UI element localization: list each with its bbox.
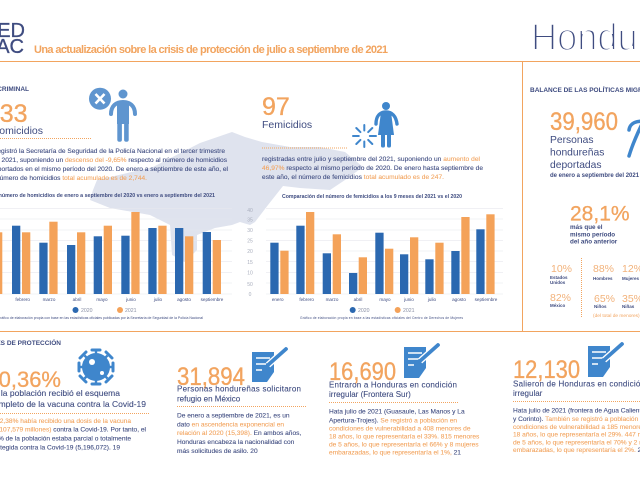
legend: 2020 bbox=[358, 308, 370, 314]
icon: document and pen bbox=[252, 349, 286, 382]
comparison bbox=[570, 224, 618, 246]
gender stats: (del total de menores) bbox=[593, 313, 640, 319]
text block bbox=[329, 408, 480, 456]
month labels bbox=[15, 297, 224, 302]
label bbox=[329, 380, 457, 399]
icon: document and pen bbox=[588, 344, 622, 377]
panel: salidas bbox=[513, 344, 640, 454]
bars 2020 bbox=[12, 226, 211, 294]
text block: dato en ascendencia exponencial en bbox=[177, 422, 284, 428]
comparison: más que el bbox=[570, 224, 603, 231]
gender stats: 65% bbox=[594, 293, 615, 305]
destination stats: México bbox=[550, 303, 566, 308]
icon: virus bbox=[79, 350, 113, 384]
section rule bbox=[0, 331, 640, 332]
month labels: marzo bbox=[326, 297, 339, 302]
panel: balance de las políticas migratorias bbox=[530, 85, 640, 319]
bars 2021 bbox=[280, 212, 495, 294]
comparison: mismo período bbox=[570, 232, 615, 238]
month labels: enero bbox=[272, 297, 284, 302]
panel: homicidios bbox=[0, 86, 229, 182]
label bbox=[513, 380, 640, 398]
vertical divider bbox=[522, 62, 523, 331]
legend bbox=[72, 307, 137, 314]
gender stats: Hombres bbox=[593, 276, 613, 281]
panel: solicitudes de refugio bbox=[177, 349, 306, 455]
y axis labels: 15 bbox=[247, 260, 253, 266]
header rule bbox=[0, 61, 640, 62]
month labels: junio bbox=[125, 297, 136, 302]
label: irregular (Frontera Sur) bbox=[329, 390, 411, 399]
number: porcentaje: 28,1% bbox=[570, 202, 630, 226]
month labels: marzo bbox=[43, 297, 56, 302]
logo bbox=[0, 20, 25, 58]
label: Personas bbox=[550, 135, 594, 146]
text block bbox=[262, 156, 483, 181]
destination stats bbox=[550, 263, 572, 308]
y axis labels bbox=[247, 208, 253, 298]
legend: 2021 bbox=[125, 308, 137, 314]
month labels: abril bbox=[73, 297, 81, 302]
icon: woman with burst bbox=[353, 102, 397, 148]
label: Entraron a Honduras en condición bbox=[329, 380, 457, 390]
text block: De enero a septiembre de 2021, es un bbox=[177, 412, 290, 420]
text block bbox=[0, 148, 229, 182]
map of Honduras background bbox=[90, 132, 363, 262]
legend: 2021 bbox=[403, 308, 415, 314]
bars 2021 bbox=[0, 212, 221, 294]
y axis labels: 25 bbox=[247, 238, 253, 244]
text block: registradas entre julio y septiembre del 2021, suponiendo un aumento del bbox=[262, 156, 481, 163]
month labels: mayo bbox=[96, 297, 108, 302]
y axis labels: 50 bbox=[247, 282, 253, 288]
label: deportadas bbox=[550, 160, 602, 171]
label bbox=[0, 388, 146, 409]
month labels: julio bbox=[153, 297, 163, 302]
label: irregular bbox=[513, 389, 543, 398]
text block bbox=[513, 408, 640, 454]
month labels: abril bbox=[354, 297, 362, 302]
month labels: septiembre bbox=[475, 297, 498, 302]
number: 97 bbox=[262, 93, 290, 121]
y axis labels: 20 bbox=[247, 249, 253, 255]
dotted divider bbox=[580, 258, 582, 318]
source note: Gráfico de elaboración propia en base a las estadísticas oficiales del Centro de Derechos de Mujeres bbox=[300, 316, 463, 320]
dotted divider bbox=[513, 400, 640, 402]
text block bbox=[0, 418, 147, 452]
month labels: septiembre bbox=[201, 297, 224, 302]
bars 2020 bbox=[270, 226, 485, 294]
icon: arrow bbox=[629, 121, 640, 156]
month labels: mayo bbox=[379, 297, 391, 302]
destination stats: Unidos bbox=[550, 280, 566, 285]
label bbox=[177, 385, 301, 404]
dotted divider bbox=[0, 412, 150, 414]
label: Personas hondureñas solicitaron bbox=[177, 385, 301, 394]
source note: Gráfico de elaboración propia con base en las estadísticas oficiales publicadas por la Secretaría de Seguridad de la Policía Nacional bbox=[0, 316, 203, 320]
chart title: Comparación del número de femicidios a los 9 meses del 2021 vs el 2020 bbox=[282, 194, 462, 200]
destination stats: 82% bbox=[550, 292, 571, 304]
y axis labels: 10 bbox=[247, 270, 253, 276]
number: 12,130 bbox=[513, 356, 580, 384]
dotted divider bbox=[177, 406, 306, 408]
month labels: febrero bbox=[299, 297, 314, 302]
text block bbox=[177, 412, 301, 455]
period: de enero a septiembre del 2021 bbox=[550, 173, 640, 179]
gender stats: 88% bbox=[593, 263, 614, 275]
icon: document and pen bbox=[404, 345, 438, 378]
dotted divider bbox=[0, 138, 92, 140]
number: 16,690 bbox=[329, 358, 396, 386]
text block: Apertura-Trojes). Se registró a población en bbox=[329, 418, 457, 424]
chart: homicidios bbox=[0, 193, 232, 320]
label: refugio en México bbox=[177, 394, 241, 404]
y axis labels: 40 bbox=[247, 208, 253, 214]
month labels bbox=[272, 297, 498, 302]
chart: femicidios bbox=[247, 194, 503, 320]
text block: embarazadas, lo que representaría el 1%, 21 bbox=[329, 450, 461, 456]
text block: relación al 2020 (15,398). En ambos años, bbox=[177, 430, 301, 437]
number: 31,894 bbox=[177, 363, 245, 391]
text block: 46,97% respecto al mismo período de 2020. De enero hasta septiembre de bbox=[262, 165, 483, 172]
y axis labels: 30 bbox=[247, 228, 253, 234]
number: deportadas: 39,960 bbox=[550, 108, 618, 136]
panel: femicidios bbox=[262, 93, 483, 181]
month labels: agosto bbox=[177, 297, 191, 302]
destination stats: Estados bbox=[550, 275, 568, 280]
text block: 18 años, lo que representaría el 33%. 815 menores bbox=[329, 434, 480, 440]
title: Una actualización sobre la crisis de protección de julio a septiembre de 2021 bbox=[34, 44, 388, 56]
gender stats bbox=[593, 263, 640, 319]
text block: número de homicidios total acumulado es de 2,744. bbox=[0, 175, 147, 182]
dotted divider bbox=[262, 147, 347, 149]
icon: person with x bbox=[89, 88, 135, 142]
destination stats: 10% bbox=[551, 263, 572, 275]
label bbox=[550, 135, 604, 171]
legend: 2020 bbox=[81, 308, 93, 314]
panel: entradas por frontera sur bbox=[329, 345, 480, 456]
text block: Honduras encabeza la nacionalidad con bbox=[177, 439, 295, 446]
text block: Hata julio de 2021 (Guasaule, Las Manos y La bbox=[329, 408, 465, 416]
month labels: febrero bbox=[15, 297, 30, 302]
gender stats: Mujeres bbox=[622, 276, 640, 281]
panel: necesidades de protección bbox=[0, 338, 150, 452]
text block: de 5 años, lo que representaría el 66% y 8 mujeres bbox=[329, 442, 479, 448]
gender stats: Niños bbox=[594, 304, 607, 309]
text block: más solicitudes de asilo. 20 bbox=[177, 448, 258, 455]
month labels: julio bbox=[427, 297, 437, 302]
label: hondureñas bbox=[550, 148, 604, 158]
dotted divider bbox=[329, 402, 458, 404]
text block: este año, el número de femicidios total acumulado es de 247. bbox=[262, 174, 444, 181]
month labels: agosto bbox=[452, 297, 466, 302]
gender stats: Niñas bbox=[622, 304, 635, 309]
y axis labels: 0 bbox=[249, 292, 252, 298]
month labels: junio bbox=[403, 297, 414, 302]
comparison: del año anterior bbox=[570, 238, 618, 246]
text block: condiciones de vulnerabilidad a 408 menores de bbox=[329, 426, 471, 432]
label: Femicidios bbox=[262, 119, 312, 131]
legend bbox=[350, 307, 415, 314]
y axis labels: 35 bbox=[247, 218, 253, 224]
